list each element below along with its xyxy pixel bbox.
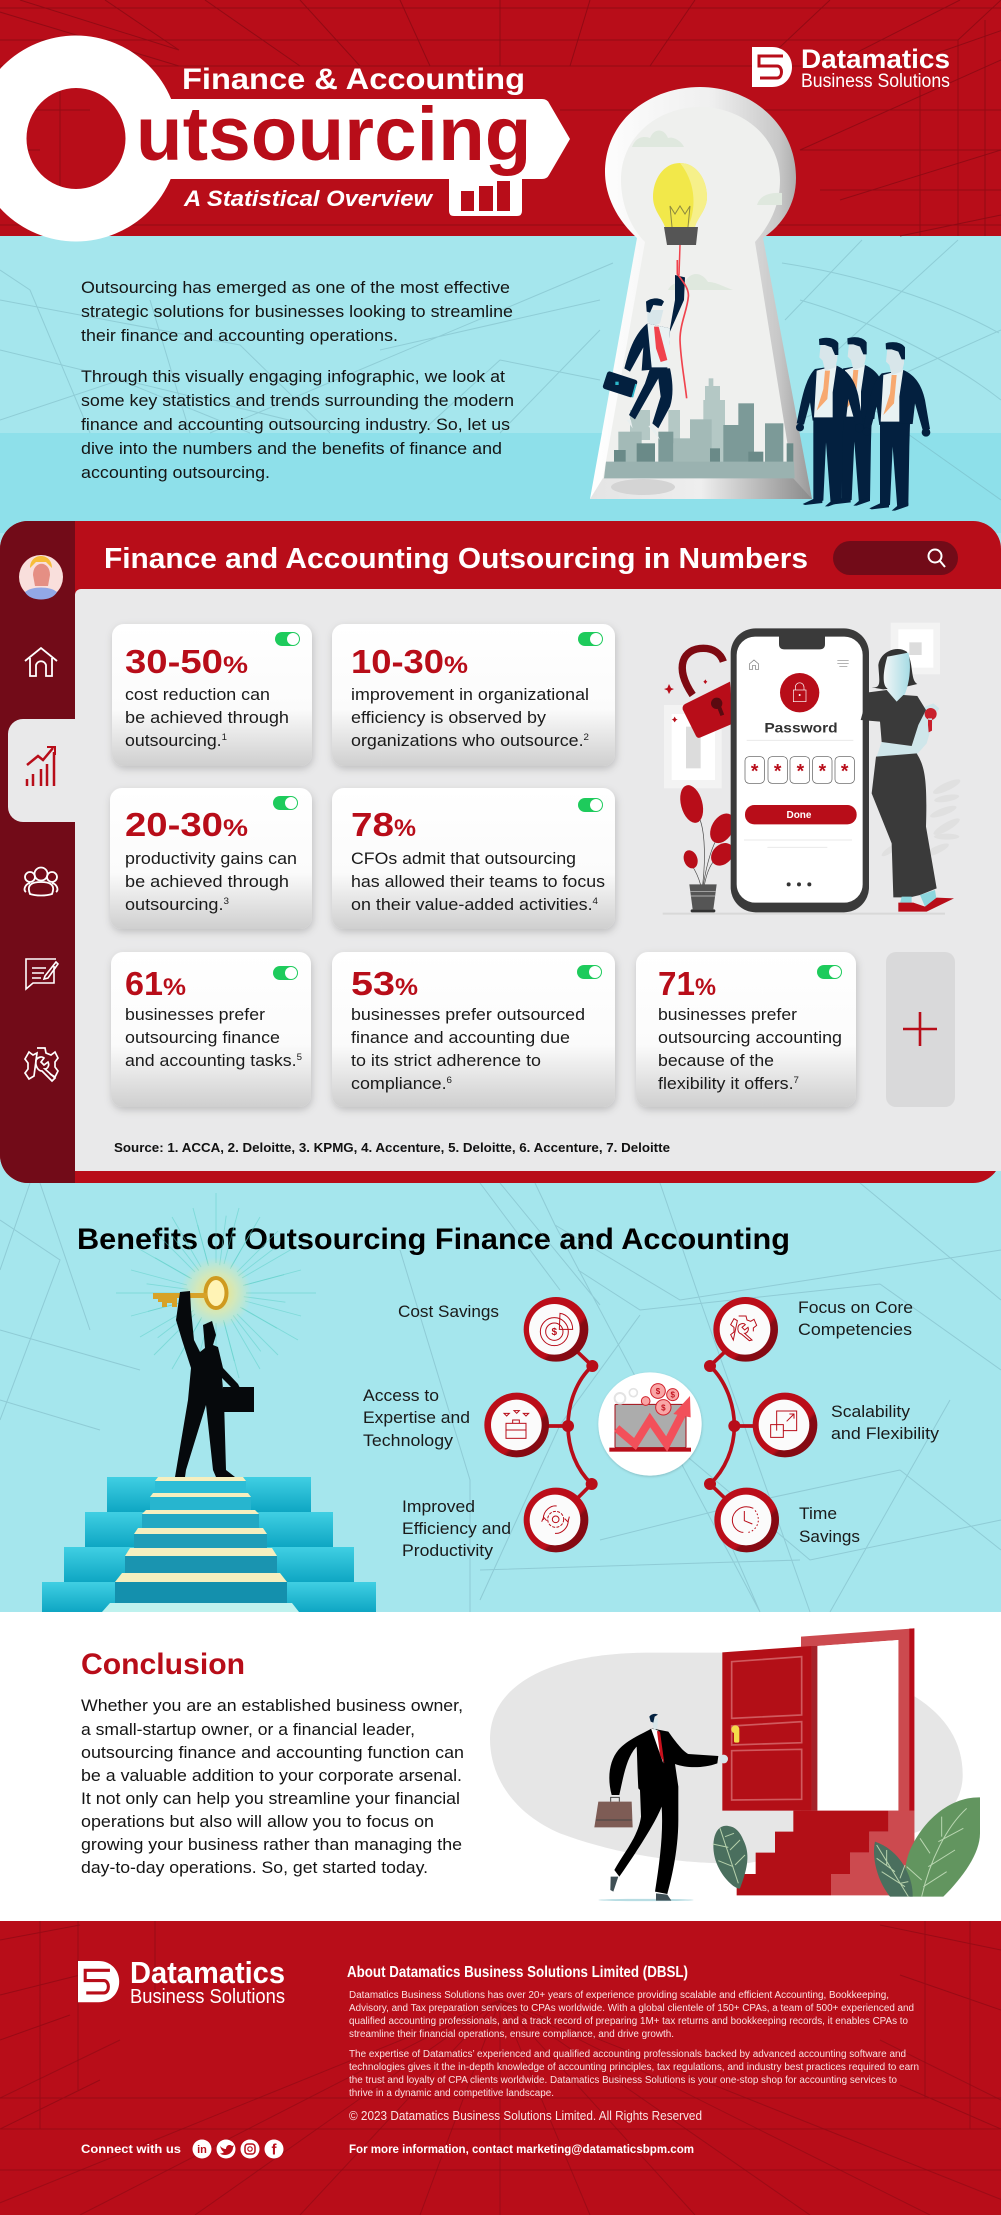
about text: Datamatics Business Solutions has over 20+ years of experience providing scalable and efficient Accounting, Bookkeeping,: [349, 1990, 889, 2001]
conclusion body: growing your business rather than managing the: [81, 1835, 462, 1854]
stat card: 78% CFOs: [332, 788, 615, 929]
conclusion heading: Conclusion: [81, 1648, 245, 1681]
about text: technologies gives it the in-depth knowledge of accounting principles, tax regulations, and industry best practices required to earn: [349, 2062, 919, 2073]
about text: [349, 1990, 919, 2099]
benefit labels: Expertise and: [363, 1409, 470, 1427]
red door: [722, 1646, 817, 1811]
conclusion body: outsourcing finance and accounting function can: [81, 1743, 464, 1762]
smartphone: *: [819, 762, 827, 783]
stat card: 61% prefer outsourcing: %: [163, 974, 186, 1001]
stat card: 71% flexibility: flexibility it offers.: [658, 1075, 783, 1093]
ground line: [663, 913, 945, 915]
conclusion body: [81, 1696, 464, 1877]
about text: the trust and loyalty of CPA clients worldwide. Datamatics Business Solutions is your one-stop shop for accounting services to: [349, 2075, 897, 2086]
stat card: 61% prefer outsourcing: 5: [297, 1052, 302, 1062]
stat card: 20-30% productivity: 3: [224, 896, 229, 906]
illustration: phone password screen with woman: [663, 623, 962, 915]
about text: Advisory, and Tax preparation services to CPAs worldwide. With a global clientele of 150+ CPAs, a team of 500+ experienced and: [349, 2003, 914, 2014]
subtitle: A Statistical Overview: [183, 186, 434, 211]
benefit labels: Scalability: [831, 1403, 911, 1421]
stat card: 61% prefer outsourcing: and accounting tasks.: [125, 1052, 285, 1070]
source line: Source: 1. ACCA, 2. Deloitte, 3. KPMG, 4. Accenture, 5. Deloitte, 6. Accenture, 7. Deloitte: [114, 1140, 670, 1155]
wall sockets: [664, 623, 940, 788]
stat card: 78% CFOs: 4: [593, 896, 598, 906]
stat card: 61% prefer outsourcing: outsourcing finance: [125, 1029, 280, 1047]
intro text: finance and accounting outsourcing industry. So, let us: [81, 416, 510, 434]
center circle: laptop with growth: [598, 1372, 702, 1476]
stat card: 53% compliance: 53: [351, 966, 395, 1003]
stat card: 30-50% cost reduction: be achieved through: [125, 709, 289, 727]
stat card: 71% flexibility: 7: [794, 1075, 799, 1085]
stat card: 20-30% productivity: be achieved through: [125, 873, 289, 891]
about heading: About Datamatics Business Solutions Limited (DBSL): [347, 1964, 688, 1981]
title: Finance & Accounting: Finance & Accounting: [182, 63, 525, 96]
stat card: 10-30% efficiency: %: [444, 652, 468, 679]
center steps: [102, 1477, 299, 1612]
benefit icon: cost savings: $: [552, 1327, 558, 1338]
social icons: f: [272, 2142, 278, 2158]
stat card: 30-50% cost reduction: [112, 624, 312, 766]
benefit icon: cost savings: [524, 1297, 588, 1362]
benefit labels: Technology: [363, 1432, 454, 1450]
about text: The expertise of Datamatics’ experienced and qualified accounting professionals backed by advanced accounting software and: [349, 2049, 906, 2060]
stat card: 10-30% efficiency: efficiency is observed by: [351, 709, 547, 727]
silhouette man: [175, 1291, 254, 1477]
stat card: 30-50% cost reduction: outsourcing.: [125, 732, 215, 750]
stat card: 20-30% productivity: productivity gains can: [125, 850, 297, 868]
stat card: 61% prefer outsourcing: 61: [125, 966, 163, 1003]
smartphone: *: [774, 762, 782, 783]
stat card: 10-30% efficiency: [332, 624, 615, 766]
benefit icon: time savings: [714, 1488, 779, 1552]
stat card: 71% flexibility: because of the: [658, 1052, 774, 1070]
stat card: 71% flexibility: 71: [658, 966, 695, 1003]
stat card: 53% compliance: compliance.: [351, 1075, 439, 1093]
panel heading: Finance and Accounting Outsourcing in Numbers: [104, 543, 808, 575]
conclusion body: day-to-day operations. So, get started today.: [81, 1858, 428, 1877]
stat card: 53% compliance: businesses prefer outsourced: [351, 1006, 585, 1024]
smartphone: *: [797, 762, 805, 783]
stat card: 10-30% efficiency: organizations who outsource.: [351, 732, 566, 750]
intro text: [81, 279, 514, 482]
stat card: 71% flexibility: [636, 952, 856, 1107]
plants: [713, 1797, 980, 1897]
illustration: keyhole: [590, 87, 812, 499]
logo: Datamatics footer: [78, 1955, 285, 2008]
panel: finance and accounting outsourcing in numbers: [0, 521, 1001, 1183]
stat card: 30-50% cost reduction: %: [223, 652, 248, 679]
sidebar active tab: [8, 719, 75, 822]
key tooth with bar chart icon: [449, 178, 522, 216]
stat card: 20-30% productivity: 20-30: [125, 807, 223, 844]
stair tiers: [42, 1477, 376, 1612]
stat card: 30-50% cost reduction: cost reduction can: [125, 686, 270, 704]
logo: Datamatics header: Datamatics: [801, 44, 950, 74]
stat card: 10-30% efficiency: improvement in organizational: [351, 686, 589, 704]
golden key: [153, 1278, 226, 1308]
illustration: businessman entering red door: [490, 1628, 980, 1901]
about text: qualified accounting professionals, and a track record of preparing 1M+ tax returns and bookkeeping records, it enables CPAs to: [349, 2016, 908, 2027]
benefit labels: and Flexibility: [831, 1425, 940, 1443]
benefit icon: core competencies: [713, 1297, 778, 1362]
stat card: 61% prefer outsourcing: businesses prefer: [125, 1006, 266, 1024]
copyright: © 2023 Datamatics Business Solutions Limited. All Rights Reserved: [349, 2109, 702, 2123]
stat card: 78% CFOs: has allowed their teams to focus: [351, 873, 605, 891]
logo: Datamatics footer: Business Solutions: [130, 1986, 285, 2008]
stat card: 78% CFOs: %: [394, 815, 416, 842]
footer: [0, 1921, 1001, 2215]
potted plant: [676, 783, 740, 912]
stat card: 53% compliance: %: [395, 974, 418, 1001]
conclusion body: Whether you are an established business owner,: [81, 1696, 463, 1715]
logo: Datamatics header: [752, 44, 950, 92]
logo: Datamatics header: Business Solutions: [801, 71, 950, 92]
stairs: [737, 1811, 914, 1895]
social icons: in: [197, 2144, 207, 2156]
stat card: 30-50% cost reduction: 1: [222, 732, 227, 742]
smartphone: [731, 628, 869, 912]
benefit labels: Efficiency and: [402, 1520, 511, 1538]
benefit icon: improved efficiency: [524, 1488, 588, 1552]
about text: streamline their financial operations, ensure compliance, and drive growth.: [349, 2029, 674, 2040]
center circle: laptop with growth: $: [661, 1403, 666, 1412]
stat card: 53% compliance: 6: [447, 1075, 452, 1085]
key-shaped title badge: [0, 36, 570, 242]
stat card: 61% prefer outsourcing: [111, 952, 311, 1107]
illustration: city skyline: [604, 378, 795, 478]
stat card: 78% CFOs: on their value-added activities.: [351, 896, 574, 914]
benefit labels: Improved: [402, 1498, 475, 1516]
illustration: businessman hanging from bulb rope: [602, 260, 688, 440]
clouds: [632, 130, 782, 290]
briefcase: [602, 371, 638, 398]
icon: note with pen: [26, 959, 58, 989]
icon: settings wrench: [25, 1048, 58, 1081]
key shaft: [125, 99, 570, 179]
illustration: three businessmen watching: [796, 337, 930, 511]
intro text: some key statistics and trends surrounding the modern: [81, 392, 514, 410]
door frame: [801, 1628, 914, 1895]
connect with us: Connect with us: [81, 2142, 181, 2156]
search bar: [833, 541, 958, 575]
center circle: laptop with growth: $: [670, 1390, 675, 1399]
intro text: Outsourcing has emerged as one of the most effective: [81, 279, 510, 297]
stat card: 20-30% productivity: outsourcing.: [125, 896, 215, 914]
light bulb: [653, 163, 707, 275]
benefit icon: access to expertise: [484, 1393, 549, 1457]
stat card: 71% flexibility: businesses prefer: [658, 1006, 798, 1024]
illustration: businessman on stairs holding golden key: [42, 1193, 376, 1612]
smartphone: Done: [787, 810, 812, 821]
conclusion body: It not only can help you streamline your financial: [81, 1789, 460, 1808]
intro text: their finance and accounting operations.: [81, 327, 398, 345]
benefit labels: Savings: [799, 1528, 860, 1546]
benefit labels: Focus on Core: [798, 1299, 913, 1317]
center circle: laptop with growth: $: [656, 1387, 661, 1396]
benefit icon: scalability: [753, 1393, 817, 1457]
intro text: Through this visually engaging infographic, we look at: [81, 368, 505, 386]
stat card: 53% compliance: [332, 952, 615, 1107]
benefit labels: [363, 1299, 940, 1560]
smartphone: Password: [764, 719, 838, 735]
icon: avatar: [19, 555, 63, 600]
benefit labels: Access to: [363, 1387, 439, 1405]
benefit labels: Competencies: [798, 1321, 912, 1339]
intro text: dive into the numbers and the benefits of finance and: [81, 440, 502, 458]
icon: home: [25, 648, 57, 676]
icon: people: [25, 868, 57, 896]
stat card: 53% compliance: finance and accounting due: [351, 1029, 570, 1047]
panel: conclusion: [0, 1612, 1001, 1921]
stat card: 53% compliance: to its strict adherence to: [351, 1052, 541, 1070]
icon: growth chart: [27, 747, 55, 786]
benefits hub diagram: [484, 1297, 817, 1552]
stat card: 10-30% efficiency: 2: [584, 732, 589, 742]
light rays: [116, 1193, 316, 1393]
smartphone: *: [841, 762, 849, 783]
key ring and letter O: [0, 36, 179, 242]
panel frame: [0, 521, 1001, 1183]
gray blob: [490, 1653, 963, 1863]
conclusion body: operations but also will allow you to focus on: [81, 1812, 434, 1831]
benefit labels: Time: [799, 1505, 837, 1523]
about text: thrive in a dynamic and competitive landscape.: [349, 2088, 554, 2099]
add card with plus icon: [886, 952, 955, 1107]
stat card: 20-30% productivity: %: [223, 815, 248, 842]
social icons: [192, 2140, 284, 2158]
stat card: 20-30% productivity: [110, 788, 312, 929]
benefit labels: Cost Savings: [398, 1303, 499, 1321]
benefit labels: Productivity: [402, 1542, 494, 1560]
connectors: [547, 1352, 757, 1498]
woman holding key: [861, 649, 954, 912]
stat card: 78% CFOs: CFOs admit that outsourcing: [351, 850, 576, 868]
open padlock: [664, 648, 733, 738]
intro text: strategic solutions for businesses looking to streamline: [81, 303, 513, 321]
logo: Datamatics footer: Datamatics: [130, 1955, 285, 1990]
conclusion body: be a valuable addition to your corporate arsenal.: [81, 1766, 462, 1785]
stat card: 71% flexibility: outsourcing accounting: [658, 1029, 842, 1047]
stat card: 30-50% cost reduction: 30-50: [125, 644, 223, 681]
stat card: 78% CFOs: 78: [351, 807, 394, 844]
section heading: benefits: Benefits of Outsourcing Finance and Accounting: [77, 1223, 790, 1256]
smartphone: *: [751, 762, 759, 783]
stat card: 10-30% efficiency: 10-30: [351, 644, 444, 681]
stat card: 71% flexibility: %: [695, 974, 716, 1001]
contact line: For more information, contact marketing@datamaticsbpm.com: [349, 2142, 694, 2156]
background foliage: [880, 777, 962, 859]
title: Outsourcing: utsourcing: [136, 92, 532, 177]
conclusion body: a small-startup owner, or a financial leader,: [81, 1720, 415, 1739]
intro text: accounting outsourcing.: [81, 464, 270, 482]
walking businessman: [594, 1714, 728, 1901]
